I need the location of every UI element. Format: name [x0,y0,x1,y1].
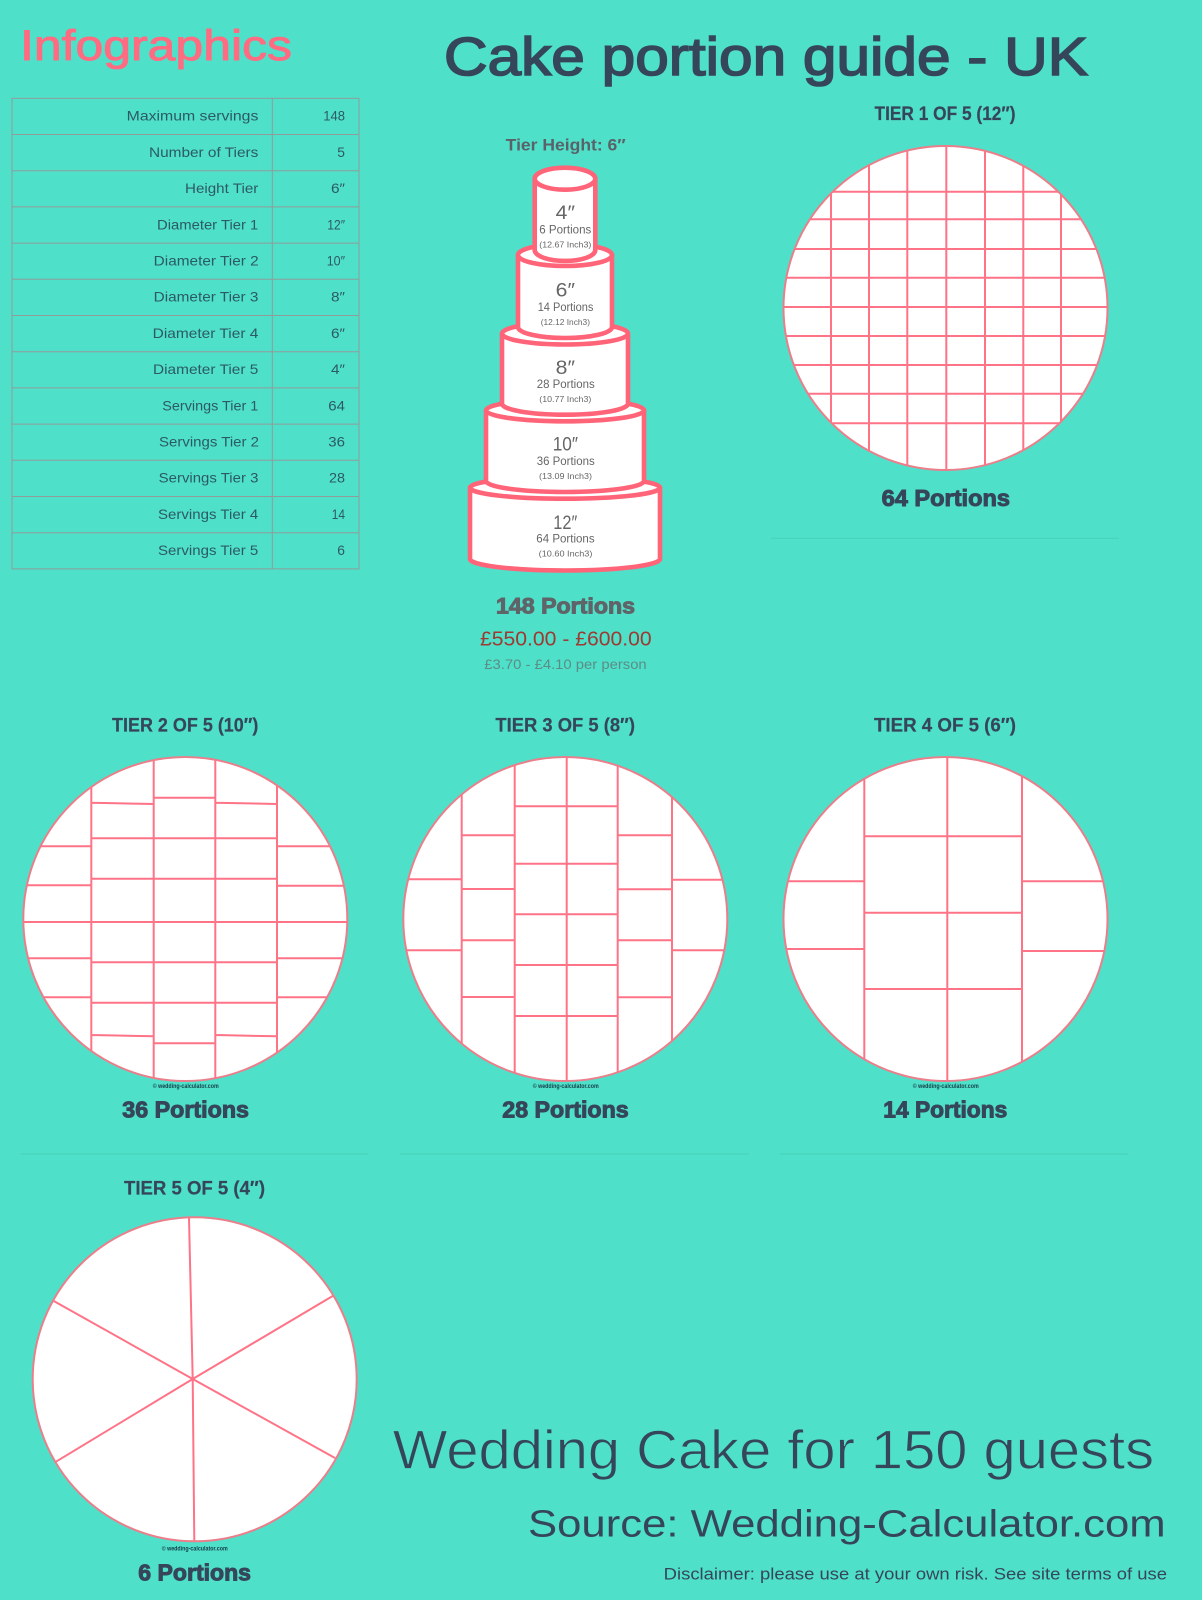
row: height tier: 6″ [331,180,345,196]
panel: tier 5 [33,1177,357,1586]
portions: tier 4: 14 Portions [883,1097,1007,1123]
row: diameter tier 3 [154,289,345,305]
row: servings tier 4 [158,506,345,522]
row: diameter tier 2: Diameter Tier 2 [154,252,259,268]
heading: tier 4: TIER 4 OF 5 (6″) [874,715,1016,737]
portions: tier 1: 64 Portions [882,485,1010,511]
row: servings tier 4: Servings Tier 4 [158,506,259,522]
cake tier: 4 inch: 4″ [556,203,575,224]
row: diameter tier 5: 4″ [331,361,345,377]
brand heading: Infographics: Infographics [20,22,292,70]
row: diameter tier 1: 12″ [327,216,345,232]
cake tier: 8 inch: 8″ [556,358,575,379]
total portions: 148 Portions [496,593,635,618]
row: maximum servings: 148 [323,108,345,124]
row: diameter tier 5: Diameter Tier 5 [153,361,259,377]
panel: tier 3 [400,715,730,1123]
disclaimer: Disclaimer: please use at your own risk. See site terms of use [664,1565,1167,1583]
portions: tier 5: 6 Portions [138,1560,251,1586]
row: servings tier 2: 36 [328,434,345,450]
heading: tier 1: TIER 1 OF 5 (12″) [874,103,1016,125]
panel: tier 2 [20,715,350,1123]
cake tier: 6 inch [518,244,612,338]
row: servings tier 5: 6 [337,542,345,558]
row: number of tiers [149,144,345,160]
cutting diagram: tier 4 [780,750,1110,1090]
row: height tier: Height Tier [185,180,259,196]
watermark: tier 3: © wedding-calculator.com [533,1083,599,1090]
panel: tier 4 [780,715,1110,1123]
row: diameter tier 1 [157,216,345,232]
cake tier: 8 inch: 28 Portions [537,379,595,391]
watermark: tier 4: © wedding-calculator.com [913,1083,979,1090]
footer heading: Wedding Cake for 150 guests [393,1418,1154,1480]
row: servings tier 1 [162,397,345,413]
cake tier: 12 inch: (10.60 Inch3) [539,549,593,559]
cake tier: 10 inch [486,399,644,492]
row: diameter tier 2: 10″ [327,252,345,268]
price range: £550.00 - £600.00 [480,629,652,651]
tier height label: Tier Height: 6″ [506,136,626,155]
heading: tier 5: TIER 5 OF 5 (4″) [124,1177,265,1199]
cake tier: 8 inch: (10.77 Inch3) [539,394,591,404]
portions: tier 3: 28 Portions [502,1097,629,1123]
row: diameter tier 1: Diameter Tier 1 [157,216,259,232]
row: diameter tier 2 [154,252,345,268]
cake tier: 6 inch: 14 Portions [538,302,594,314]
cake tier: 4 inch: 6 Portions [539,224,592,236]
heading: tier 2: TIER 2 OF 5 (10″) [112,715,258,737]
cutting diagram: tier 5 [33,1217,357,1541]
row: number of tiers: Number of Tiers [149,144,258,160]
row: height tier [185,180,345,196]
row: diameter tier 4: 6″ [331,325,345,341]
row: servings tier 1: Servings Tier 1 [162,397,259,413]
row: servings tier 3 [159,470,345,486]
cake tier: 12 inch: 12″ [553,513,578,534]
row: diameter tier 3: Diameter Tier 3 [154,289,259,305]
row: servings tier 2: Servings Tier 2 [159,434,259,450]
heading: tier 3: TIER 3 OF 5 (8″) [495,715,635,737]
row: servings tier 4: 14 [332,506,345,522]
cake tier: 6 inch: (12.12 Inch3) [541,317,590,327]
row: servings tier 3: 28 [329,470,345,486]
title: Cake portion guide - UK [444,27,1088,87]
price per person: £3.70 - £4.10 per person [484,656,647,672]
cake tier: 12 inch: 64 Portions [536,534,595,546]
portions: tier 2: 36 Portions [122,1097,249,1123]
row: servings tier 2 [159,434,345,450]
row: maximum servings: Maximum servings [127,108,258,124]
row: number of tiers: 5 [337,144,345,160]
row: maximum servings [127,108,345,124]
row: servings tier 3: Servings Tier 3 [159,470,259,486]
cutting diagram: tier 2 [20,750,350,1090]
row: servings tier 5 [158,542,345,558]
watermark: tier 5: © wedding-calculator.com [162,1546,228,1553]
row: diameter tier 4 [153,325,345,341]
watermark: tier 2: © wedding-calculator.com [153,1083,219,1090]
cake tier: 10 inch: 10″ [553,435,578,456]
row: diameter tier 5 [153,361,345,377]
cutting diagram: tier 3 [400,750,730,1090]
row: diameter tier 3: 8″ [331,289,345,305]
row: servings tier 1: 64 [328,397,345,413]
cake illustration [470,168,660,570]
cake tier: 12 inch [470,477,660,570]
cake tier: 4 inch: (12.67 Inch3) [539,239,591,249]
cake tier: 4 inch [535,168,595,261]
cake tier: 10 inch: 36 Portions [537,456,595,468]
cutting diagram: tier 1 [780,140,1110,480]
row: diameter tier 4: Diameter Tier 4 [153,325,259,341]
table: cake specifications [12,98,359,569]
cake tier: 8 inch [502,322,628,415]
row: servings tier 5: Servings Tier 5 [158,542,259,558]
panel: tier 1 [780,103,1110,511]
cake tier: 6 inch: 6″ [556,281,575,302]
cake tier: 10 inch: (13.09 Inch3) [539,471,592,481]
source line: Source: Wedding-Calculator.com [528,1504,1166,1546]
